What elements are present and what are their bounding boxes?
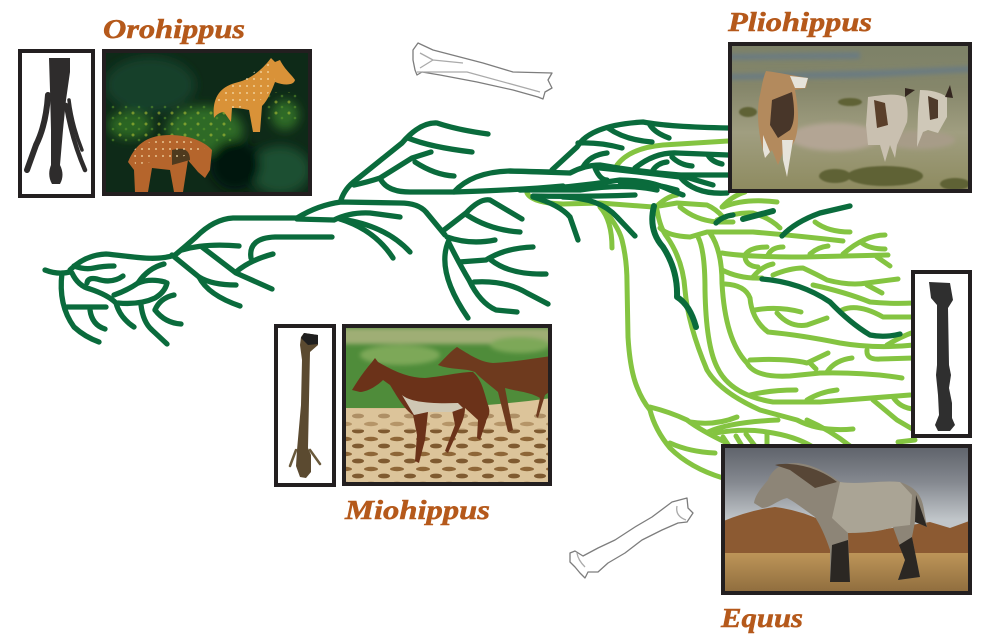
panel: Equus foot bone bbox=[913, 272, 970, 436]
illustration: Przewalski's horse bbox=[754, 463, 927, 582]
illustration: rear horse bbox=[917, 85, 953, 147]
icon: single-toe foot fossil bbox=[929, 282, 955, 431]
panel: Equus photograph bbox=[721, 444, 972, 595]
label: Miohippus: Miohippus bbox=[344, 495, 490, 525]
panel: Orohippus foot bone bbox=[20, 51, 93, 196]
icon: Miohippus foot fossil bbox=[290, 333, 320, 478]
panel: Miohippus foot bone bbox=[276, 326, 334, 485]
panel: Pliohippus illustration bbox=[728, 42, 972, 193]
panel: Orohippus illustration bbox=[102, 49, 312, 196]
illustration: rear horse bbox=[438, 347, 552, 432]
illustration: middle horse bbox=[866, 88, 915, 162]
label: Equus: Equus bbox=[720, 603, 803, 633]
illustration: lead horse bbox=[758, 71, 808, 177]
dark green tree: main lineage and early branches bbox=[45, 122, 900, 344]
illustration: lower bone sketch bbox=[570, 498, 693, 578]
illustration: lower spotted horse bbox=[128, 135, 212, 192]
illustration: shrubs bbox=[739, 98, 970, 190]
panel: Miohippus illustration bbox=[342, 324, 552, 486]
icon: three-toed foot fossil bbox=[27, 58, 85, 184]
label: Orohippus: Orohippus bbox=[103, 14, 245, 44]
illustration: upper spotted horse bbox=[214, 58, 295, 132]
light green tree: later branches bbox=[527, 141, 915, 478]
illustration: front horse bbox=[352, 358, 489, 463]
label: Pliohippus: Pliohippus bbox=[727, 7, 872, 37]
illustration: upper bone sketch bbox=[413, 43, 552, 99]
